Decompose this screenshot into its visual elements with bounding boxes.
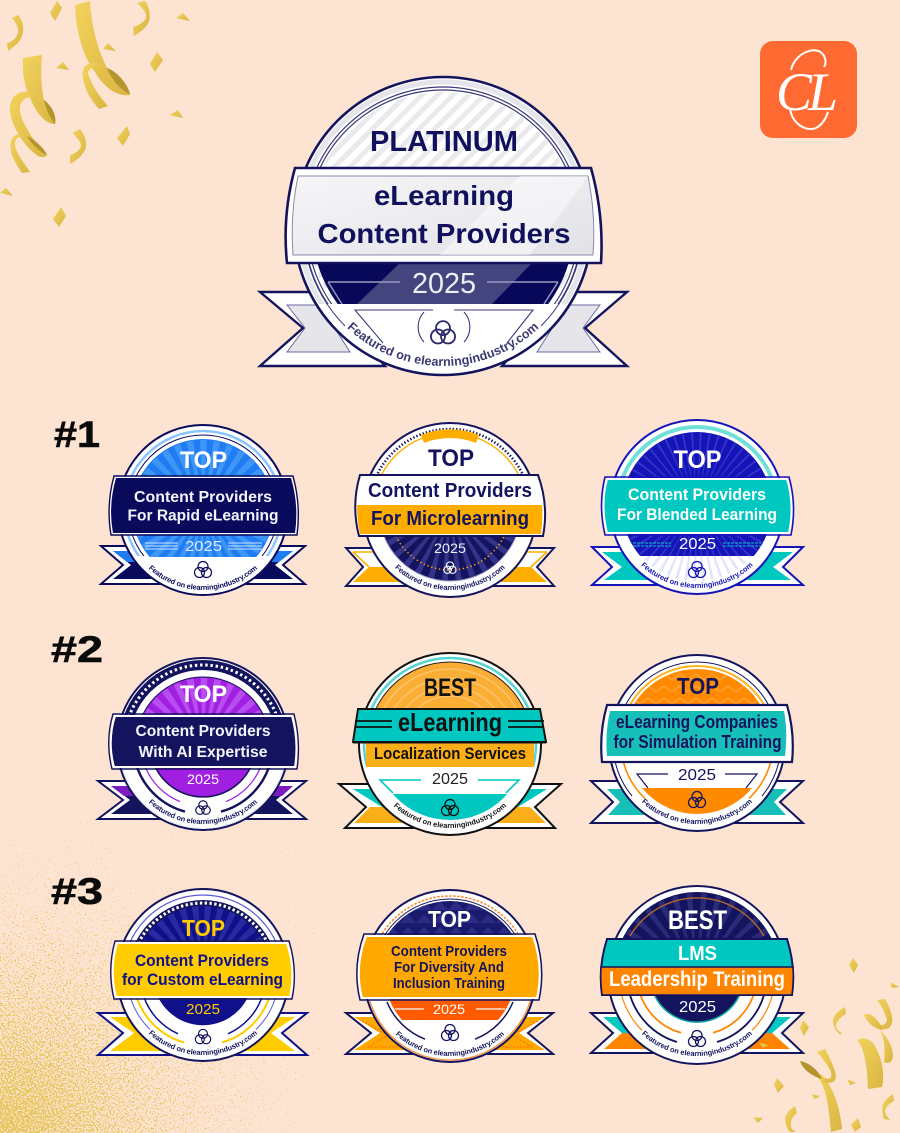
banner	[111, 478, 296, 533]
badge: LMS leadership training	[588, 885, 806, 1065]
seal	[117, 658, 289, 830]
rank label 1: #1	[54, 414, 100, 455]
badge: platinum eLearning content providers	[256, 76, 630, 376]
year: 2025	[187, 771, 219, 787]
banner text: eLearning	[398, 707, 502, 737]
confetti top left	[0, 1, 190, 227]
banner text line 1: Content Providers	[628, 485, 766, 504]
featured text: Featured on elearningindustry.com	[148, 565, 258, 590]
banner text line 1: Content Providers	[368, 480, 532, 502]
ribbon	[591, 781, 803, 823]
icon: interlocked rings	[444, 562, 456, 573]
ribbon	[339, 784, 561, 828]
icon: interlocked rings	[431, 321, 455, 344]
banner: platinum	[286, 168, 602, 263]
ribbon	[346, 548, 554, 586]
ribbon: platinum	[260, 292, 627, 366]
badge: blended learning	[590, 419, 806, 595]
heading: TOP	[182, 915, 225, 941]
year: 2025	[433, 1001, 465, 1017]
seal	[117, 889, 289, 1061]
icon: interlocked rings	[688, 562, 706, 578]
featured text: Featured on elearningindustry.com	[641, 562, 753, 588]
heading: TOP	[428, 906, 471, 932]
heading: TOP	[677, 673, 719, 699]
seal	[609, 655, 785, 831]
heading: TOP	[428, 445, 474, 472]
heading: BEST	[424, 674, 476, 702]
featured text: Featured on elearningindustry.com	[395, 564, 505, 590]
seal	[359, 653, 541, 835]
gold glitter corner	[0, 813, 320, 1133]
badge: custom eLearning	[95, 888, 310, 1062]
banner text line 1: Content Providers	[134, 489, 272, 506]
banner text line 1: Content Providers	[391, 943, 507, 960]
ribbon	[98, 1013, 307, 1055]
year: 2025	[432, 771, 468, 788]
year: 2025	[678, 767, 716, 784]
featured text: Featured on elearningindustry.com	[148, 1030, 258, 1056]
banner outline	[109, 476, 298, 535]
icon: interlocked rings	[688, 1030, 706, 1046]
banner text line 2: For Diversity And	[394, 959, 504, 976]
badge: rapid eLearning	[98, 424, 308, 596]
logo: CL	[760, 41, 857, 138]
rank label 2: #2	[51, 629, 103, 670]
banner text line 2: for Custom eLearning	[122, 970, 283, 989]
year: 2025	[679, 536, 716, 553]
banner text line 3: Inclusion Training	[393, 975, 505, 992]
icon: interlocked rings	[195, 1029, 211, 1044]
banner	[357, 934, 542, 1000]
seal	[363, 423, 537, 597]
logo: CL: L	[807, 62, 838, 122]
confetti bottom right	[753, 958, 899, 1132]
ribbon	[591, 1013, 803, 1053]
banner text line 2: For Microlearning	[371, 508, 529, 530]
banner text: Content Providers: Content Providers	[318, 218, 570, 249]
year: 2025	[412, 268, 476, 300]
banner text line 2: With AI Expertise	[138, 744, 268, 761]
featured text: Featured on elearningindustry.com	[396, 1031, 504, 1056]
banner text: eLearning: eLearning	[374, 180, 514, 211]
year: 2025	[185, 538, 222, 555]
banner text line 1: Content Providers	[136, 723, 271, 740]
banner	[109, 714, 298, 769]
seal	[118, 425, 288, 595]
heading: TOP	[180, 681, 227, 708]
year: 2025	[434, 540, 466, 556]
banner	[355, 475, 545, 536]
seal: platinum	[294, 77, 592, 375]
featured text: Featured on elearningindustry.com	[394, 802, 506, 828]
ribbon	[101, 546, 305, 584]
banner	[601, 705, 793, 762]
ribbon	[346, 1013, 553, 1054]
heading: PLATINUM: PLATINUM	[370, 126, 518, 158]
ribbon	[98, 781, 306, 819]
banner	[353, 709, 546, 744]
rank label 3: #3	[51, 871, 103, 912]
banner text line 2: for Simulation Training	[614, 732, 782, 752]
badge: microlearning	[344, 422, 556, 598]
icon: interlocked rings	[688, 792, 706, 808]
icon: interlocked rings	[194, 562, 212, 578]
banner	[111, 941, 294, 999]
badge: simulation training	[588, 654, 806, 832]
featured text: Featured on elearningindustry.com	[642, 1030, 752, 1056]
banner text line 1: Content Providers	[135, 951, 269, 970]
banner	[602, 477, 794, 535]
badge: AI expertise	[95, 657, 309, 831]
heading: TOP	[674, 446, 722, 474]
banner text line 2: For Blended Learning	[617, 505, 777, 524]
seal	[364, 890, 536, 1062]
heading: BEST	[668, 905, 727, 935]
banner text line 2: For Rapid eLearning	[128, 508, 278, 524]
seal	[608, 886, 786, 1064]
logo: CL: C	[776, 62, 813, 122]
banner text line 2: Leadership Training	[609, 968, 785, 991]
icon: interlocked rings	[442, 800, 458, 816]
band text: Localization Services	[374, 744, 526, 763]
featured text: Featured on elearningindustry.com	[642, 798, 752, 824]
year: 2025	[679, 999, 716, 1016]
banner	[601, 939, 793, 995]
featured text: Featured on elearningindustry.com	[148, 799, 258, 824]
badge: eLearning localization services	[336, 652, 564, 836]
ribbon	[592, 547, 803, 585]
featured text: Featured on elearningindustry.com	[348, 322, 538, 367]
heading: TOP	[180, 447, 227, 474]
badge: diversity and inclusion	[343, 889, 556, 1063]
year: 2025	[186, 1001, 220, 1018]
icon: interlocked rings	[442, 1024, 458, 1040]
seal	[610, 420, 784, 594]
banner text line 1: LMS	[678, 943, 717, 965]
icon: interlocked rings	[196, 801, 210, 814]
banner text line 1: eLearning Companies	[616, 712, 778, 732]
